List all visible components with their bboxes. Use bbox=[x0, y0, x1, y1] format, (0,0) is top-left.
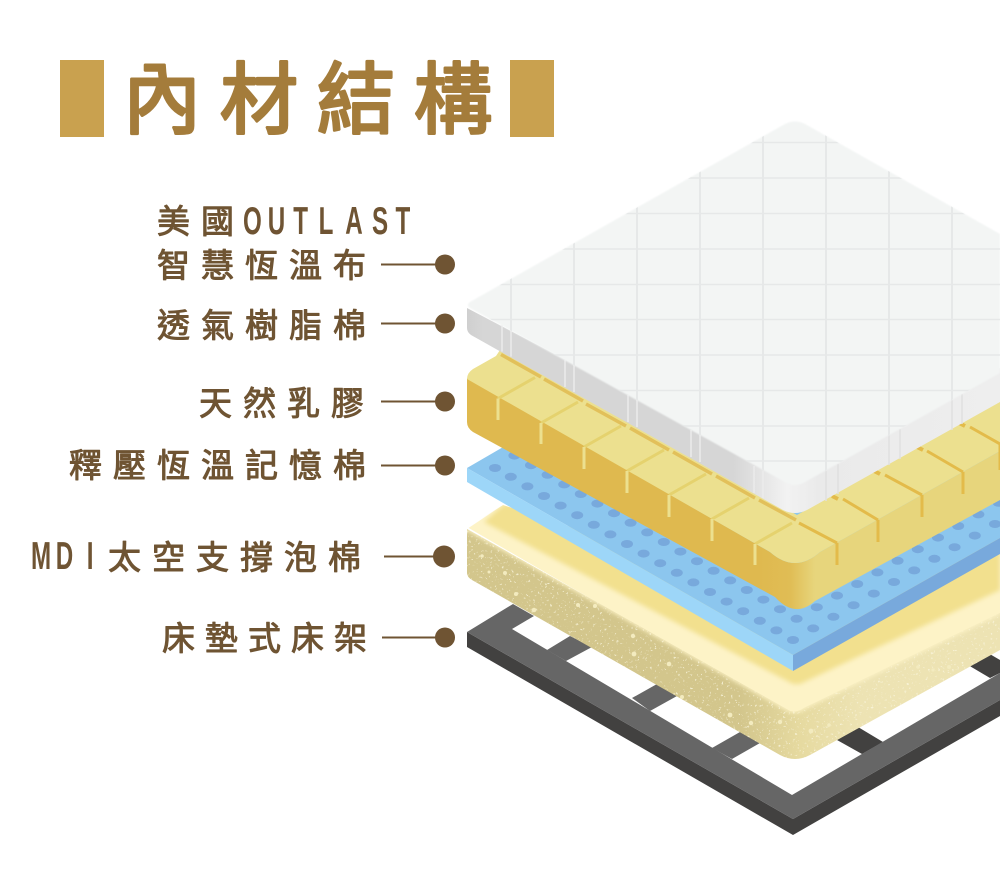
label: bed frame: 床墊式床架 bbox=[162, 620, 377, 657]
latex right strip notches bbox=[832, 423, 965, 499]
title right block bbox=[510, 60, 554, 137]
latex side bbox=[467, 378, 1000, 609]
label: OUTLAST fabric: 智慧恆溫布 bbox=[157, 247, 377, 284]
latex right grooves bbox=[799, 427, 1000, 565]
frame side bbox=[467, 632, 1000, 835]
title bbox=[60, 56, 554, 144]
label: natural latex bbox=[199, 385, 455, 422]
layer: memory foam bbox=[467, 400, 1000, 671]
label: MDI support foam bbox=[31, 534, 455, 577]
blue top face bbox=[467, 400, 1000, 655]
white side stitch lines bbox=[502, 325, 763, 498]
blue perforation dots bbox=[489, 452, 1000, 644]
layer: breathable resin foam and fabric bbox=[450, 100, 1000, 513]
label: MDI support foam: 太空支撐泡棉 bbox=[108, 539, 372, 576]
foam speckles bbox=[467, 529, 1000, 758]
label: OUTLAST fabric bbox=[157, 199, 455, 284]
white side bbox=[467, 308, 1000, 513]
latex left side ticks bbox=[498, 398, 755, 565]
layer: MDI support foam bbox=[467, 505, 1000, 759]
layer: bed frame bbox=[467, 604, 1000, 835]
label: natural latex: 天然乳膠 bbox=[199, 385, 375, 422]
label: OUTLAST fabric: 美國 bbox=[157, 203, 245, 240]
title text: 內材結構 bbox=[123, 56, 511, 144]
latex strip left bbox=[501, 354, 796, 520]
title left block bbox=[60, 60, 104, 137]
foam light bevel bbox=[468, 505, 1000, 712]
latex left grooves bbox=[498, 378, 792, 544]
latex top face bbox=[467, 350, 1000, 563]
frame top bars bbox=[467, 604, 1000, 819]
blue right side bbox=[793, 538, 1000, 671]
white top face bbox=[468, 122, 1000, 485]
foam yellow top bbox=[484, 505, 1000, 686]
layer: natural latex bbox=[467, 350, 1000, 609]
foam side bbox=[467, 529, 1000, 759]
blue left side bbox=[467, 468, 793, 671]
label: breathable resin foam: 透氣樹脂棉 bbox=[157, 307, 377, 344]
foam soft top edge highlight bbox=[467, 527, 1000, 710]
label: OUTLAST fabric: OUTLAST bbox=[243, 199, 410, 242]
label: MDI support foam: MDI bbox=[31, 534, 94, 577]
label: memory foam: 釋壓恆溫記憶棉 bbox=[69, 447, 377, 484]
quilting grid bbox=[490, 136, 1000, 470]
frame right dark bars bbox=[837, 727, 883, 754]
